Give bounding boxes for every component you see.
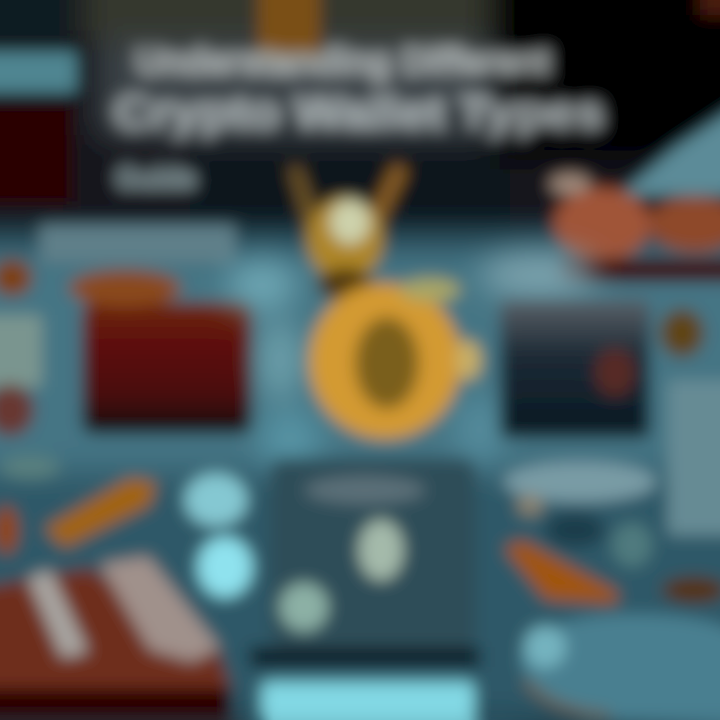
left edge objects bbox=[0, 315, 60, 479]
top gold stripe bbox=[258, 0, 320, 60]
bottom right teal bowl bbox=[520, 614, 720, 720]
title bbox=[114, 41, 604, 138]
top right teal wedge bbox=[620, 105, 720, 195]
title: Crypto Wallet Types bbox=[114, 86, 604, 138]
upper left grey band bbox=[40, 225, 235, 263]
subtitle: Guide bbox=[116, 162, 196, 195]
light cyan buttons bbox=[185, 474, 252, 597]
left dark red panel bbox=[0, 104, 72, 204]
center dark device panel bbox=[250, 458, 480, 667]
right edge panel bbox=[668, 380, 720, 535]
top right copper wallet bbox=[550, 174, 720, 282]
bottom-left striped red wallet bbox=[0, 556, 232, 720]
right dark device bbox=[500, 300, 704, 438]
teal highlight spots bbox=[228, 253, 600, 470]
central gold coin bbox=[309, 278, 481, 439]
orange pencil left bbox=[0, 478, 156, 554]
right orange pencil bbox=[504, 540, 720, 604]
title: Understanding Different bbox=[136, 41, 550, 83]
bottom edge base bbox=[0, 695, 720, 720]
left red wallet bbox=[0, 260, 252, 434]
top right red corner bbox=[700, 0, 720, 15]
right mid panel bbox=[504, 462, 656, 567]
mascot: coin-eared figure bbox=[288, 163, 408, 300]
top-left teal label bbox=[0, 52, 76, 92]
bottom cyan bar bbox=[262, 682, 474, 720]
